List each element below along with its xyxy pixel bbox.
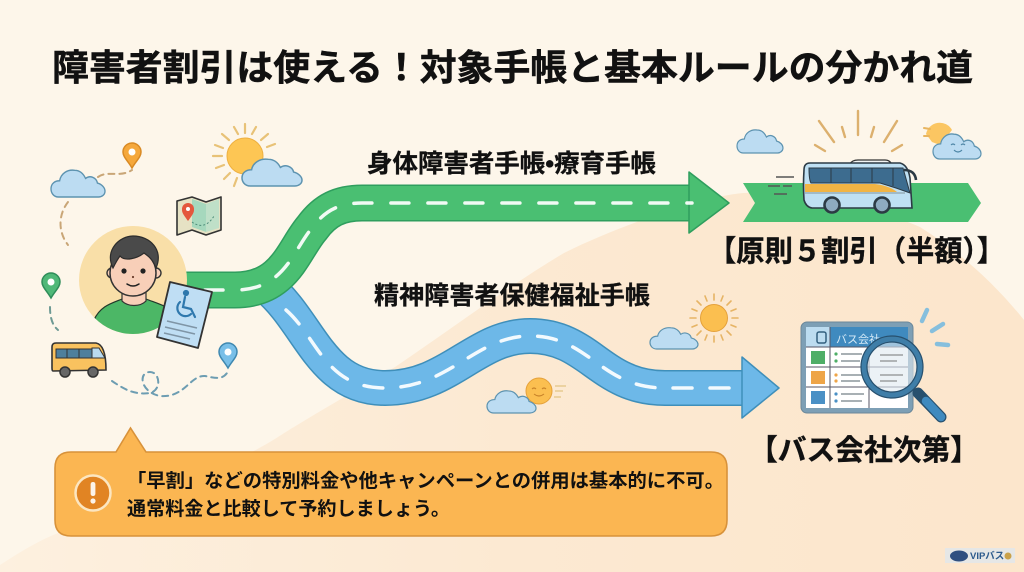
icon: mid sun and cloud: [650, 294, 738, 349]
title: 障害者割引は使える！対象手帳と基本ルールの分かれ道: [52, 47, 973, 88]
icon: disability card: [157, 282, 212, 348]
icon: blue pin: [219, 343, 237, 368]
dashed travel lines: [50, 170, 227, 396]
result label: バス会社次第: 【バス会社次第】: [749, 434, 979, 467]
icon: coach bus: [804, 160, 916, 212]
icon: sun with cloud: [213, 124, 302, 186]
icon: low sun and cloud: [487, 378, 566, 413]
icon: bus company table with magnifier: [801, 310, 948, 417]
green road arrow: [185, 172, 729, 290]
route label: 精神障害者保健福祉手帳: 精神障害者保健福祉手帳: [374, 282, 650, 310]
callout text line 1: 「早割」などの特別料金や他キャンペーンとの併用は基本的に不可。: [127, 470, 724, 492]
icon: left cloud: [51, 170, 105, 197]
icon: smiling cloud and sun: [924, 123, 981, 159]
icon: orange pin: [123, 143, 141, 168]
person avatar: [79, 226, 187, 340]
icon: top right cloud: [737, 130, 783, 153]
icon: speed lines: [768, 177, 794, 194]
icon: green pin: [42, 273, 60, 298]
green banner: [743, 183, 981, 222]
icon: sunburst over bus: [815, 111, 902, 151]
icon: map: [177, 197, 221, 235]
logo: VIPバス: [970, 551, 1004, 562]
icon: small bus: [52, 343, 106, 377]
callout text line 2: 通常料金と比較して予約しましょう。: [127, 498, 450, 520]
result label: 原則5割引: 【原則５割引（半額）】: [708, 235, 1005, 268]
blue road arrow: [266, 286, 779, 418]
icon: bus company table with magnifier: バス会社: [836, 332, 880, 346]
logo: [945, 548, 1015, 563]
icon: exclamation: [76, 476, 110, 510]
callout: notice: [55, 428, 727, 536]
route label: 身体障害者手帳・療育手帳: 身体障害者手帳•療育手帳: [367, 150, 656, 178]
